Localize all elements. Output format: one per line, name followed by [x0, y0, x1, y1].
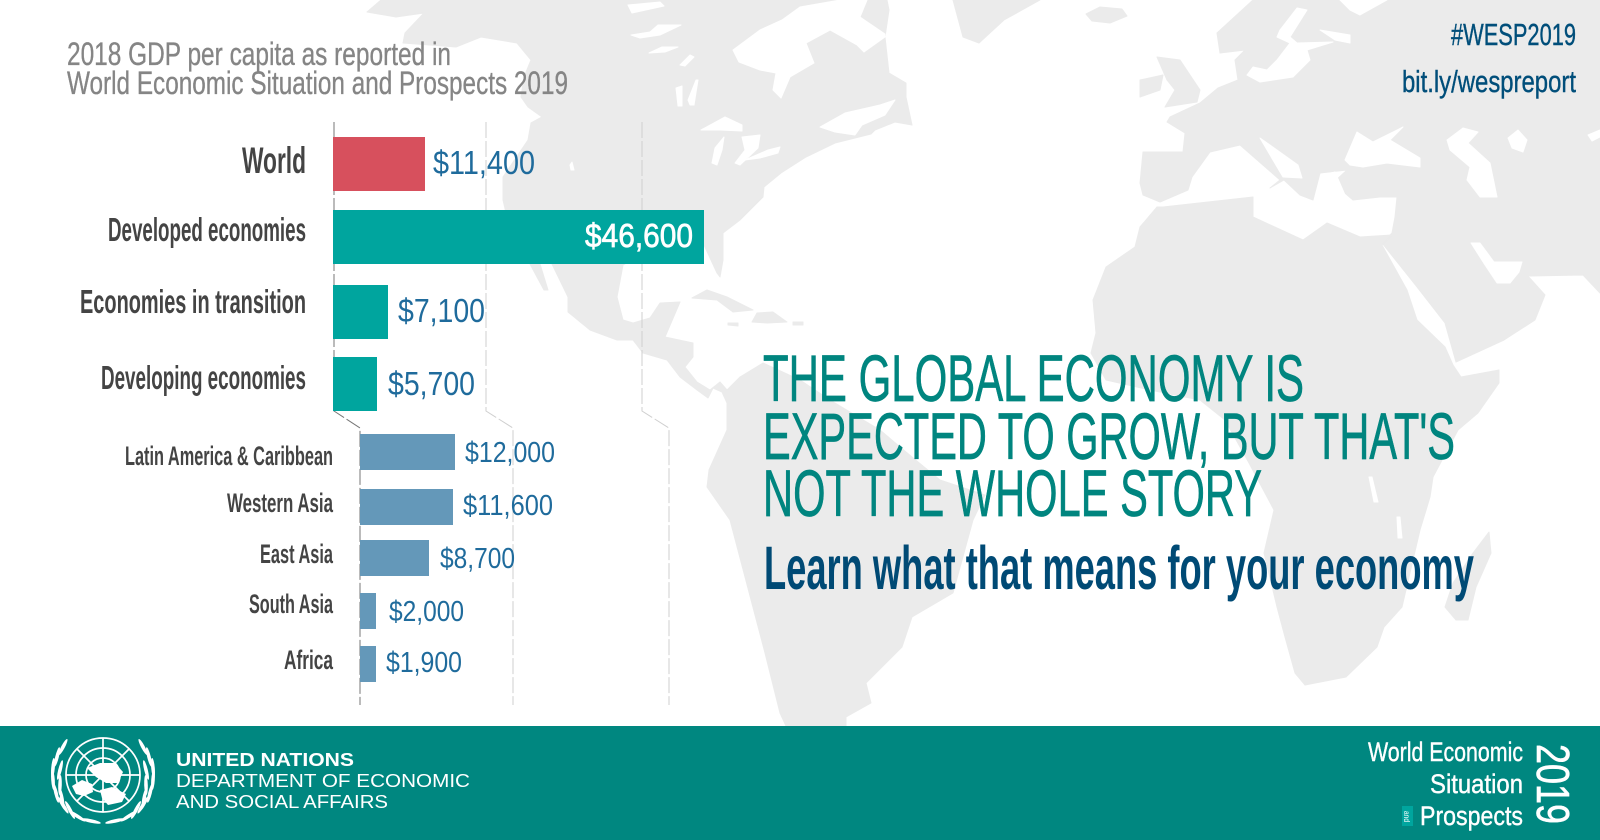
row: South Asia: [249, 589, 464, 629]
WESP report logo: [1368, 737, 1579, 831]
hashtag and link: [1402, 17, 1576, 99]
row: Developing economies: [101, 357, 475, 411]
row: Developed economies: $46,600: [585, 217, 693, 254]
row: World: [242, 137, 535, 191]
row: Economies in transition: Economies in transition: [80, 283, 306, 320]
row: Developed economies: [108, 210, 704, 264]
row: Economies in transition: $7,100: [398, 292, 485, 329]
row: World: $11,400: [433, 144, 535, 181]
regional bar chart: [125, 434, 555, 682]
chart title: World Economic Situation and Prospects 2019: [67, 65, 568, 101]
UN DESA wordmark: AND SOCIAL AFFAIRS: [176, 791, 388, 812]
row: Developed economies: Developed economies: [108, 211, 306, 248]
UN DESA wordmark: UNITED NATIONS: [176, 749, 354, 770]
row: Africa: [284, 645, 462, 682]
row: South Asia: $2,000: [389, 596, 464, 628]
row: Africa: Africa: [284, 645, 334, 675]
row: East Asia: East Asia: [260, 539, 334, 569]
main bar chart: world and economy groups: [80, 137, 704, 411]
row: Economies in transition: [80, 283, 485, 339]
WESP report logo: and: [1402, 811, 1411, 822]
row: East Asia: [260, 539, 515, 576]
UN DESA wordmark: DEPARTMENT OF ECONOMIC: [176, 770, 470, 791]
footer band: [0, 726, 1600, 840]
row: Latin America and Caribbean: $12,000: [465, 437, 555, 469]
row: Latin America and Caribbean: [125, 434, 555, 471]
headline: [763, 341, 1455, 530]
row: Western Asia: Western Asia: [227, 488, 334, 518]
row: South Asia: South Asia: [249, 589, 334, 619]
WESP report logo: World Economic: [1368, 737, 1523, 767]
row: World: World: [242, 140, 306, 181]
chart gridlines: [334, 122, 669, 705]
row: Africa: $1,900: [386, 647, 462, 679]
UN DESA wordmark: [176, 749, 470, 812]
headline: THE GLOBAL ECONOMY IS: [763, 341, 1304, 415]
headline: NOT THE WHOLE STORY: [763, 456, 1262, 530]
row: Western Asia: $11,600: [463, 490, 553, 522]
row: Developing economies: Developing economies: [101, 359, 306, 396]
row: Western Asia: [227, 488, 553, 525]
WESP report logo: Prospects: [1420, 801, 1523, 831]
row: Latin America and Caribbean: Latin America & Caribbean: [125, 441, 333, 471]
row: East Asia: $8,700: [440, 543, 515, 575]
chart title: [67, 36, 568, 101]
WESP report logo: Situation: [1430, 769, 1523, 799]
row: Developing economies: $5,700: [388, 365, 475, 402]
chart title: 2018 GDP per capita as reported in: [67, 36, 451, 72]
icon: UN emblem: [50, 738, 156, 825]
